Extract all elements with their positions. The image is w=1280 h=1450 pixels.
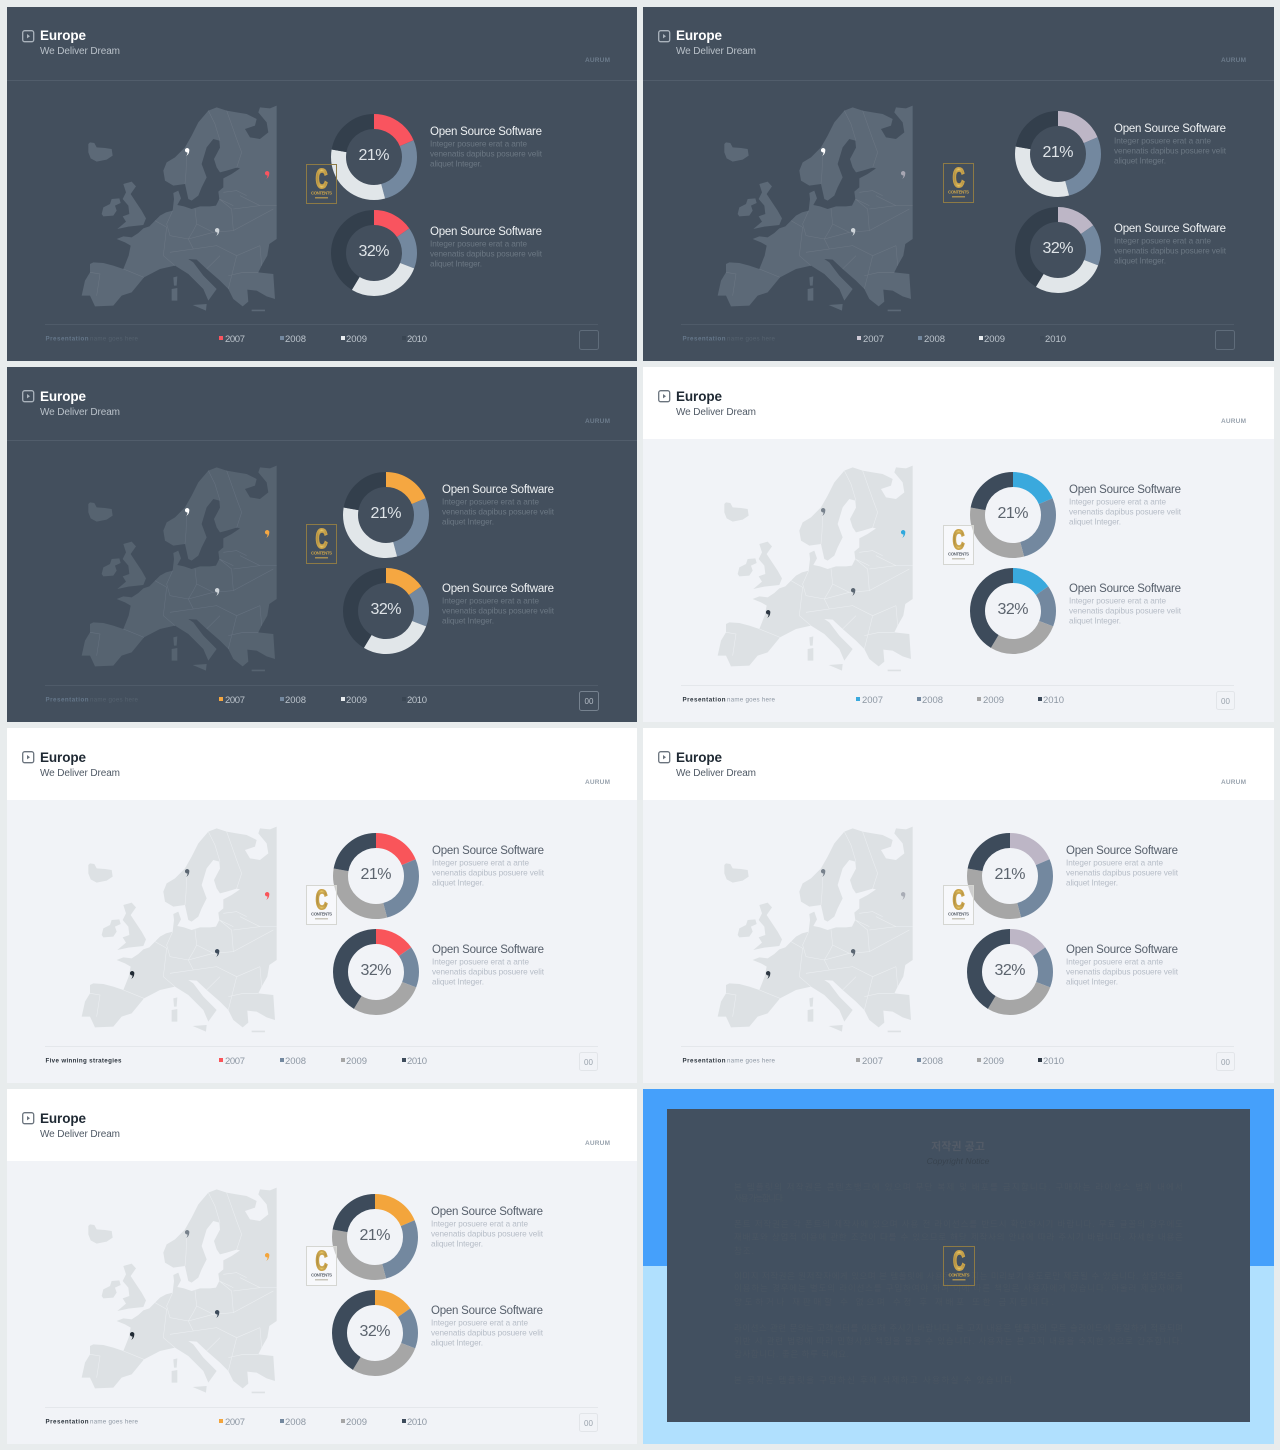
copyright body text: 폰트 저작권은 각 폰트의 제작사에 있으며 사용 전 라이선스를 반드시 확인하시기 바랍니다. 무료 글꼴의 경우에도 [734,1219,1183,1229]
copyright heading: 저작권 공고 [931,1139,985,1153]
text block 1 [1069,484,1182,526]
map of Europe [82,827,277,1032]
donut chart 21% [1022,118,1094,190]
footer and legend [682,330,1234,350]
donut chart 32% [350,576,422,646]
footer and legend: 2007 [862,695,883,706]
text block 2: aliquet Integer. [1069,616,1121,626]
panel: slide 2 dark lavender [643,7,1274,361]
donut chart 32% [340,1298,410,1368]
header: We Deliver Dream [40,768,120,779]
footer and legend: 2010 [407,1056,427,1067]
footer and legend: 2008 [922,695,943,706]
header: Europe [676,28,722,43]
footer and legend: Presentation [46,696,89,704]
donut chart 21% [978,480,1048,550]
panel: slide 6 light lavender [643,728,1274,1083]
donut chart 21% [974,840,1046,912]
header: Europe [40,1111,86,1126]
map of Europe [82,466,277,671]
header: We Deliver Dream [676,407,756,418]
text block 2: Open Source Software [430,226,542,238]
header: AURUM [585,57,610,64]
map of Europe [718,827,913,1032]
text block 2: Open Source Software [431,1305,543,1317]
donut chart 21% [340,1202,410,1272]
text block 2: Integer posuere erat a ante [1069,596,1166,606]
footer and legend: name goes here [727,696,776,704]
text block 1: aliquet Integer. [1066,878,1118,888]
text block 2: aliquet Integer. [442,616,494,626]
text block 2 [1069,583,1182,626]
logo badge: CONTENTS [311,550,332,556]
footer and legend: 2010 [1043,1056,1064,1067]
text block 1: aliquet Integer. [430,160,482,168]
text block 1: Open Source Software [1114,123,1226,135]
copyright body text: 양도하거나 재판매할 수 없으며 수정 후 재배포 또한 금지됩니다. [734,1297,1054,1307]
footer and legend: 2010 [407,695,427,706]
map of Europe [82,1188,277,1393]
footer and legend [46,692,598,710]
text block 2: Integer posuere erat a ante [1114,236,1211,246]
header: AURUM [1221,57,1246,64]
donut chart 21% [338,122,410,192]
footer and legend: 2008 [285,1417,306,1428]
panel: slide 5 light red [7,728,637,1083]
text block 1: Open Source Software [1066,845,1178,857]
text block 1: Open Source Software [431,1206,543,1218]
logo badge [306,1245,336,1286]
header: AURUM [585,418,610,425]
text block 1: Integer posuere erat a ante [442,498,539,506]
donut chart 21%: 21% [360,866,392,883]
footer and legend: name goes here [90,336,139,342]
logo badge: CONTENTS [311,1272,332,1278]
text block 1: Open Source Software [442,484,554,496]
copyright body text: 이용하는 경우에는 별도의 라이선스를 구입하여야 하며 이에 따른 책임은 사용자에게 있습니다. 아울러 제삼자에게 [734,1283,1183,1293]
header: We Deliver Dream [40,407,120,418]
text block 1: Integer posuere erat a ante [432,858,529,868]
header [659,750,1246,786]
logo badge [944,524,974,564]
text block 2: aliquet Integer. [1066,978,1118,986]
text block 2 [432,944,545,986]
panel: copyright notice [643,1089,1274,1444]
donut chart 32%: 32% [994,962,1026,979]
footer and legend: Presentation [682,1058,726,1064]
text block 2: Open Source Software [1114,223,1226,235]
donut chart 32% [338,218,410,288]
donut chart 32% [974,936,1046,1008]
header [659,389,1246,425]
footer and legend: 00 [1221,1058,1230,1067]
text block 1: aliquet Integer. [442,518,494,526]
logo badge: CONTENTS [948,1272,970,1278]
logo badge: C [315,523,328,554]
logo badge [306,523,336,564]
footer and legend: 00 [1221,697,1230,706]
footer and legend: 2008 [285,334,306,345]
text block 2: Open Source Software [442,583,554,595]
text block 1: Open Source Software [430,126,542,138]
donut chart 21%: 21% [998,505,1028,522]
copyright heading [927,1139,990,1166]
text block 2: Integer posuere erat a ante [430,240,527,248]
footer and legend: name goes here [727,1058,776,1064]
header [23,389,610,425]
header [23,750,610,786]
text block 2: aliquet Integer. [431,1338,483,1348]
donut chart 32% [978,576,1048,646]
footer and legend: name goes here [727,336,776,342]
footer and legend: 2010 [407,1417,427,1428]
text block 2 [442,583,555,626]
text block 2: venenatis dapibus posuere velit [430,250,543,258]
text block 1: aliquet Integer. [431,1240,483,1248]
footer and legend [682,692,1234,710]
footer and legend: Five winning strategies [46,1058,122,1064]
text block 2: Open Source Software [432,944,544,956]
footer and legend: name goes here [90,1418,139,1426]
footer and legend: 2009 [983,695,1004,706]
donut chart 32%: 32% [360,962,392,979]
text block 2: Integer posuere erat a ante [431,1318,528,1328]
text block 2: Integer posuere erat a ante [1066,958,1163,966]
donut chart 32%: 32% [370,601,402,618]
panel: slide 4 light blue [643,367,1274,722]
copyright body text: 위반 시 관련 법령에 따라 민형사상 책임을 물을 수 있습니다. 사용자는 본 고지 내용을 숙지한 것으로 간주합니다. [734,1336,1183,1346]
header: We Deliver Dream [40,1129,120,1140]
copyright heading: Copyright Notice [927,1156,990,1166]
logo badge [306,163,336,204]
footer and legend: 2007 [225,1417,245,1428]
text block 1: venenatis dapibus posuere velit [430,150,543,158]
copyright body text: 사용 가능합니다. [734,1193,784,1203]
header: We Deliver Dream [40,46,120,57]
footer and legend [46,1414,598,1432]
footer and legend: 2007 [862,1056,883,1067]
text block 1: Open Source Software [1069,484,1181,496]
text block 1: venenatis dapibus posuere velit [431,1230,544,1238]
footer and legend [46,330,598,350]
map of Europe [718,466,913,671]
text block 1: Integer posuere erat a ante [1069,498,1166,506]
copyright body text: 라이선스 관련 문의는 고객센터를 이용해 주시기 바랍니다. 본 고지 내용은 템플릿의 모든 슬라이드에 동일하게 적용되며 [734,1323,1183,1333]
header: AURUM [585,1140,610,1147]
copyright body text: 재배포와 상업적 이용에 관한 조건이 다를 수 있으므로 해당 제작사의 안내에 따라 주시기 바랍니다. 자세한 내용은 [734,1232,1183,1242]
text block 1: Integer posuere erat a ante [430,140,527,148]
logo badge: C [952,524,965,555]
logo badge: C [952,884,965,915]
logo badge: C [952,162,965,193]
logo badge: CONTENTS [948,912,969,916]
footer and legend: 2009 [984,334,1005,345]
header: Europe [40,389,86,404]
text block 1: aliquet Integer. [1114,156,1166,166]
donut chart 21%: 21% [994,866,1026,883]
text block 2: aliquet Integer. [430,260,482,268]
header: Europe [40,750,86,765]
text block 2: Integer posuere erat a ante [432,958,529,966]
text block 2: venenatis dapibus posuere velit [1066,968,1179,976]
header: We Deliver Dream [676,46,756,57]
text block 1: venenatis dapibus posuere velit [1066,868,1179,878]
text block 1: Integer posuere erat a ante [1114,136,1211,146]
logo badge: CONTENTS [311,190,332,196]
donut chart 21% [350,480,422,550]
panel: slide 3 dark orange [7,367,637,722]
text block 1: aliquet Integer. [1069,518,1121,526]
text block 2 [1066,944,1179,986]
text block 2 [431,1305,544,1348]
map of Europe [82,106,277,311]
footer and legend: Presentation [46,336,89,342]
panel: slide 7 light orange [7,1089,637,1444]
text block 1: venenatis dapibus posuere velit [432,868,545,878]
text block 2 [430,226,543,268]
text block 2: Integer posuere erat a ante [442,596,539,606]
footer and legend [46,1052,598,1070]
logo badge [944,1245,974,1286]
donut chart 21% [340,840,412,912]
header: Europe [40,28,86,43]
logo badge: C [315,884,328,915]
header: AURUM [1221,418,1246,425]
panel: slide 1 dark red [7,7,637,361]
footer and legend: Presentation [682,336,726,342]
text block 1: venenatis dapibus posuere velit [442,508,555,516]
footer and legend: Presentation [46,1418,89,1426]
footer and legend: 00 [584,1419,593,1428]
text block 2: venenatis dapibus posuere velit [442,606,555,616]
donut chart 21%: 21% [1042,144,1074,161]
header: Europe [676,389,722,404]
footer and legend: 2010 [407,334,427,345]
footer and legend: 2007 [225,1056,245,1067]
text block 2: venenatis dapibus posuere velit [431,1328,544,1338]
footer and legend: Presentation [682,696,726,704]
logo badge [306,884,336,924]
logo badge: CONTENTS [948,552,969,556]
copyright body text: 감사합니다. 좋은 하루 되세요. [734,1349,849,1359]
header: We Deliver Dream [676,768,756,779]
footer and legend: 2010 [1045,334,1066,345]
text block 2: Open Source Software [1069,583,1181,595]
header [23,1111,610,1147]
text block 2 [1114,223,1227,266]
footer and legend: 2007 [225,334,245,345]
text block 1 [1114,123,1227,166]
map of Europe [718,106,913,311]
footer and legend: 2009 [983,1056,1004,1067]
logo badge [944,162,974,202]
footer and legend: 00 [584,1058,593,1067]
copyright body text [734,1182,1183,1385]
donut chart 32%: 32% [358,243,390,260]
footer and legend: 00 [585,697,594,706]
footer and legend: 2007 [225,695,245,706]
logo badge: C [315,1245,328,1276]
text block 1 [1066,845,1179,888]
footer and legend: 2010 [1043,695,1064,706]
footer and legend: 2009 [346,695,367,706]
footer and legend: 2009 [346,334,367,345]
header: Europe [676,750,722,765]
donut chart 32%: 32% [360,1323,390,1340]
footer and legend: 2007 [863,334,884,345]
footer and legend: 2009 [346,1056,367,1067]
text block 1: venenatis dapibus posuere velit [1069,508,1182,516]
donut chart 32% [1022,214,1094,286]
donut chart 32%: 32% [1042,240,1074,257]
text block 1: Integer posuere erat a ante [431,1220,528,1228]
text block 1 [432,845,545,888]
logo badge: C [315,163,328,194]
text block 1: Open Source Software [432,845,544,857]
header: AURUM [585,779,610,786]
footer and legend: 2008 [922,1056,943,1067]
logo badge: C [953,1245,965,1276]
text block 2: venenatis dapibus posuere velit [432,968,545,976]
footer and legend [682,1052,1234,1070]
text block 2: venenatis dapibus posuere velit [1069,606,1182,616]
text block 1: Integer posuere erat a ante [1066,858,1163,868]
header: AURUM [1221,779,1246,786]
copyright body text: 참조. [734,1246,754,1256]
text block 2: aliquet Integer. [432,978,484,986]
footer and legend: 2008 [285,1056,306,1067]
copyright body text: 본 공지는 템플릿을 구입하신 후에 삭제하고 사용하실 수 있습니다. [734,1375,1016,1385]
header [659,28,1246,64]
donut chart 21%: 21% [360,1227,390,1244]
text block 1 [442,484,555,526]
footer and legend: name goes here [90,696,139,704]
donut chart 32% [340,936,412,1008]
donut chart 21%: 21% [370,505,402,522]
logo badge: CONTENTS [311,912,332,916]
donut chart 21%: 21% [358,147,390,164]
footer and legend: 2009 [346,1417,367,1428]
logo badge [944,884,974,924]
copyright body text: 이미지 저작권은 원저작자에게 있으며 본 템플릿에 사용된 이미지는 미리보기 용도로만 제공될 수 있습니다. 상업적으로 [734,1271,1183,1281]
copyright body text: 본 템플릿의 저작권은 콘텐츠뱅크에 있으며 무단 복제 및 배포를 금지합니다. 구매자는 라이선스 범위 내에서 [734,1182,1183,1192]
text block 2: Open Source Software [1066,944,1178,956]
text block 2: aliquet Integer. [1114,256,1166,266]
text block 1: venenatis dapibus posuere velit [1114,146,1227,156]
header [23,28,610,64]
logo badge: CONTENTS [948,190,969,194]
text block 1: aliquet Integer. [432,878,484,888]
text block 2: venenatis dapibus posuere velit [1114,246,1227,256]
footer and legend: 2008 [924,334,945,345]
text block 1 [430,126,543,168]
donut chart 32%: 32% [998,601,1028,618]
text block 1 [431,1206,544,1248]
footer and legend: 2008 [285,695,306,706]
